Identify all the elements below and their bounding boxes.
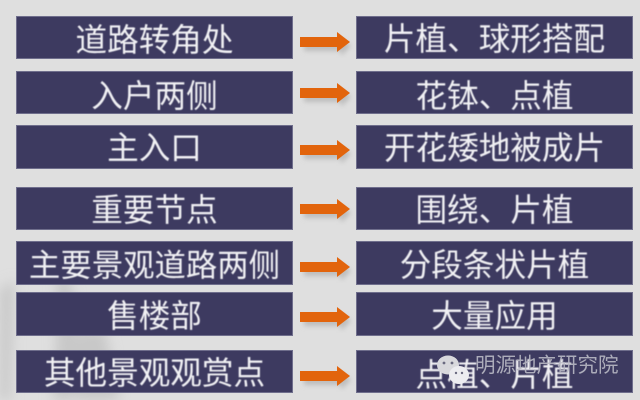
row 3 source: 主入口 xyxy=(16,125,293,169)
row 3 target: 开花矮地被成片 xyxy=(356,125,633,169)
row 6 source: 售楼部 xyxy=(16,292,293,336)
row 7 source: 其他景观观赏点: 其他景观观赏点 xyxy=(44,355,265,391)
row 2 target: 花钵、点植: 花钵、点植 xyxy=(416,78,573,114)
row 4 target: 围绕、片植: 围绕、片植 xyxy=(416,192,573,228)
row 3 arrow xyxy=(300,140,351,163)
watermark text: 明源地产研究院 xyxy=(475,354,618,377)
row 4 source: 重要节点: 重要节点 xyxy=(91,192,218,228)
row 1 arrow xyxy=(300,32,351,55)
row 6 source: 售楼部: 售楼部 xyxy=(107,298,202,334)
icon: WeChat watermark xyxy=(437,356,469,384)
row 4 arrow xyxy=(300,199,351,222)
row 7 source: 其他景观观赏点 xyxy=(16,350,293,393)
row 6 target: 大量应用 xyxy=(356,292,633,336)
row 1 target: 片植、球形搭配 xyxy=(356,16,633,59)
row 7 target: 点植、片植 xyxy=(356,350,633,393)
row 1 target: 片植、球形搭配: 片植、球形搭配 xyxy=(384,21,605,57)
row 5 source: 主要景观道路两侧: 主要景观道路两侧 xyxy=(29,248,280,283)
row 5 target: 分段条状片植 xyxy=(356,241,633,285)
row 2 source: 入户两侧: 入户两侧 xyxy=(91,78,218,114)
row 7 arrow xyxy=(300,366,351,389)
row 2 source: 入户两侧 xyxy=(16,71,293,114)
row 6 target: 大量应用: 大量应用 xyxy=(431,298,558,334)
row 2 arrow xyxy=(300,83,351,106)
row 6 arrow xyxy=(300,307,351,330)
row 5 target: 分段条状片植: 分段条状片植 xyxy=(400,247,589,283)
row 4 target: 围绕、片植 xyxy=(356,187,633,230)
row 1 source: 道路转角处: 道路转角处 xyxy=(76,22,233,58)
row 2 target: 花钵、点植 xyxy=(356,71,633,114)
row 3 source: 主入口: 主入口 xyxy=(107,130,202,166)
row 1 source: 道路转角处 xyxy=(16,16,293,59)
background ink wash decoration xyxy=(0,284,120,400)
row 5 arrow xyxy=(300,257,351,280)
row 4 source: 重要节点 xyxy=(16,187,293,230)
row 7 target: 点植、片植: 点植、片植 xyxy=(416,357,573,393)
row 3 target: 开花矮地被成片: 开花矮地被成片 xyxy=(384,130,605,166)
